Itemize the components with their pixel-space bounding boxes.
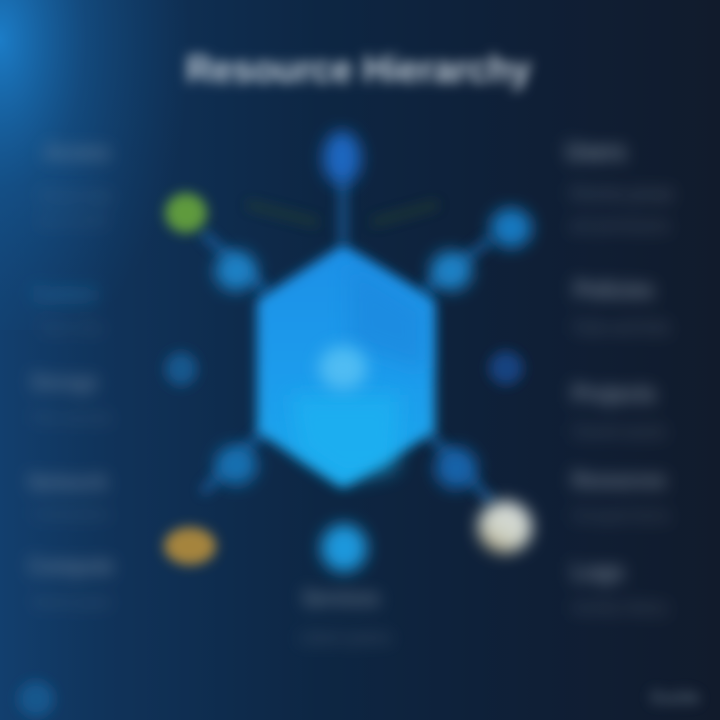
left label 3: File records bbox=[32, 408, 112, 428]
node: bottom bbox=[321, 524, 367, 572]
node: upper left green bbox=[165, 193, 207, 233]
right label 2: Policies bbox=[574, 276, 654, 304]
left label 1: and tools bbox=[38, 210, 108, 230]
right label 5: Activity history bbox=[572, 597, 668, 619]
hexagon facet: lower light bbox=[290, 395, 400, 480]
hexagon facet: upper right shade bbox=[350, 262, 425, 370]
right label 5: Logs bbox=[572, 558, 624, 586]
node: middle left bbox=[165, 352, 197, 386]
node: upper right blue bbox=[490, 208, 532, 248]
right label 1: and permissions bbox=[570, 215, 670, 237]
left label 5 bbox=[28, 553, 114, 612]
right label 2: Rules and limits bbox=[574, 317, 670, 339]
bottom left logo bbox=[18, 681, 54, 717]
right label 1: Users bbox=[566, 136, 626, 166]
bottom centre label bbox=[298, 585, 392, 649]
left label 4 bbox=[28, 469, 110, 524]
right label 5 bbox=[572, 558, 668, 619]
bottom centre label: Services bbox=[302, 585, 380, 612]
left label 5: Server power bbox=[32, 592, 112, 612]
right label 3: Owned assets bbox=[572, 421, 666, 443]
right label 3 bbox=[572, 380, 666, 443]
left label 4: Connections bbox=[32, 504, 110, 524]
left label 3 bbox=[30, 369, 112, 428]
left label 1: Shared data bbox=[38, 186, 113, 206]
left label 3: Storage bbox=[30, 369, 98, 396]
node: lower right white bbox=[478, 501, 532, 553]
left label 5: Compute bbox=[28, 553, 114, 580]
right label 3: Projects bbox=[572, 380, 656, 408]
node: inner upper left bbox=[215, 251, 257, 291]
title: Resource Hierarchy bbox=[186, 49, 531, 91]
left label 1: Access bbox=[44, 139, 110, 166]
left label 2: Control bbox=[32, 281, 96, 308]
right label 1: Directory groups bbox=[570, 183, 674, 205]
hexagon centre glow bbox=[319, 346, 367, 390]
right column labels bbox=[566, 136, 674, 619]
node: middle right bbox=[489, 351, 523, 385]
left column labels bbox=[28, 139, 114, 612]
left label 1 bbox=[38, 139, 113, 230]
right label 2 bbox=[574, 276, 670, 339]
node: top bbox=[323, 131, 361, 185]
left label 2: Team roles bbox=[38, 318, 104, 338]
right label 1 bbox=[566, 136, 674, 237]
bottom right footer mark: Guide bbox=[650, 687, 700, 709]
bottom centre label: Linked systems bbox=[298, 627, 392, 649]
node: lower left amber bbox=[164, 527, 216, 565]
right label 4: Resources bbox=[572, 467, 666, 494]
right label 4: Grouped items bbox=[572, 505, 670, 527]
right label 4 bbox=[572, 467, 670, 527]
node: inner lower right bbox=[435, 447, 477, 489]
central hexagon bbox=[257, 244, 435, 488]
node: inner upper right bbox=[430, 251, 472, 291]
node: inner lower left bbox=[215, 445, 257, 485]
left label 4: Network bbox=[28, 469, 109, 496]
left label 2 bbox=[32, 281, 104, 338]
connectors between central hexagon and outer nodes bbox=[205, 180, 490, 500]
